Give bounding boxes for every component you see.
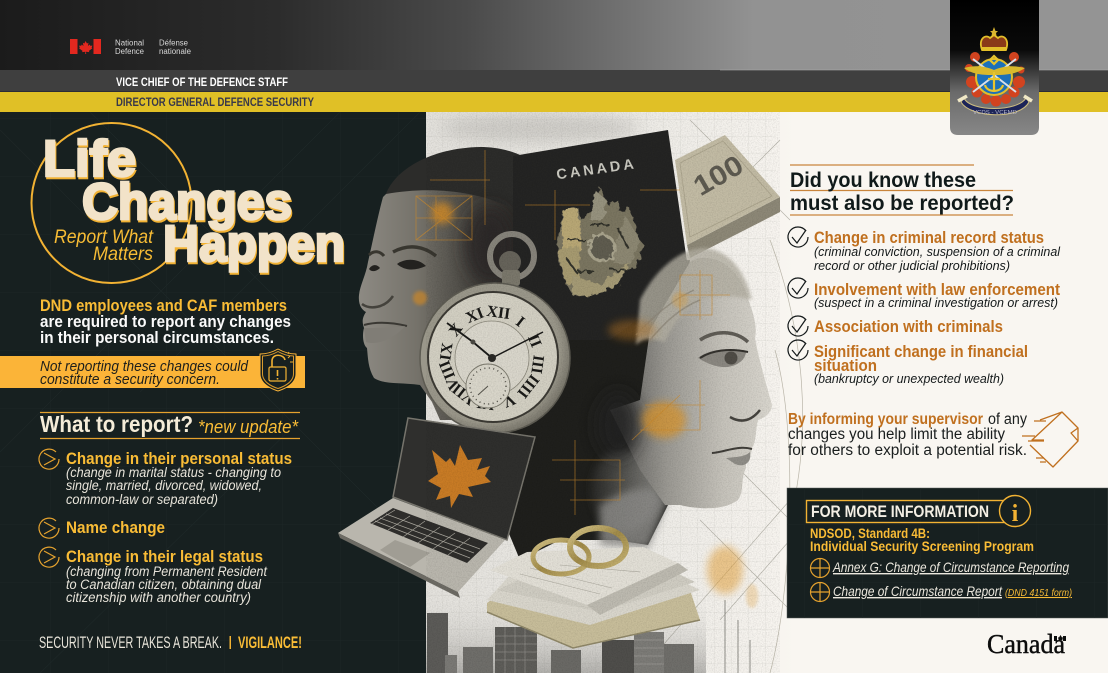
panel heading: FOR MORE INFORMATION (811, 502, 989, 521)
central illustration (338, 112, 803, 673)
item: legal status: citizenship with another country) (66, 590, 251, 605)
heading: did you know: Did you know these (790, 168, 976, 192)
reference title: Individual Security Screening Program (810, 539, 1034, 554)
watch numerals: VI (476, 393, 496, 413)
header title: VICE CHIEF OF THE DEFENCE STAFF (116, 75, 288, 89)
intro text (40, 297, 291, 347)
link: DND 4151 form: Change of Circumstance Report (833, 583, 1003, 599)
icon: passport (513, 130, 687, 340)
bill amount: 100 (688, 149, 749, 202)
icon: coat of arms (557, 187, 644, 297)
title: Life (43, 130, 136, 187)
item: name change (39, 518, 165, 538)
icon: info: i (1012, 501, 1019, 527)
item: personal status: single, married, divorced, widowed, (66, 478, 262, 493)
item: legal status: (changing from Permanent Resident (66, 564, 268, 579)
item: law enforcement: (suspect in a criminal investigation or arrest) (814, 295, 1058, 310)
left panel content (0, 123, 345, 652)
callout: security concern (0, 349, 305, 391)
header band (0, 0, 1108, 112)
watch numerals: III (527, 354, 547, 375)
item: law enforcement (788, 278, 1060, 310)
watch numerals: IIII (513, 371, 542, 401)
text: informing your supervisor: for others to exploit a potential risk. (788, 442, 1027, 459)
watch numerals: X (446, 320, 467, 340)
heading: what to report: *new update* (198, 417, 299, 437)
intro text: DND employees and CAF members (40, 297, 287, 315)
item: financial situation (788, 340, 1028, 386)
item: criminal record: record or other judicial prohibitions) (814, 258, 1010, 273)
icon: shield with open lock (260, 349, 296, 391)
logo: National Defence signature: National (115, 38, 144, 48)
intro text: in their personal circumstances. (40, 329, 274, 347)
header subtitle: DIRECTOR GENERAL DEFENCE SECURITY (116, 95, 314, 109)
item: financial situation: (bankruptcy or unexpected wealth) (814, 371, 1004, 386)
text: informing your supervisor: changes you help limit the ability (788, 426, 1005, 443)
title: Changes (82, 173, 292, 230)
text: informing your supervisor: By informing your supervisor (788, 411, 983, 428)
watch numerals: VIII (436, 358, 463, 392)
panel: emblem tab (950, 0, 1039, 135)
panel: left dark panel background (0, 112, 426, 673)
watch numerals: XI (464, 305, 486, 327)
item: personal status: common-law or separated) (66, 492, 218, 507)
title tagline (54, 227, 154, 265)
logo: National Defence signature: nationale (159, 47, 192, 56)
watch numerals (431, 297, 553, 419)
icon: stack of papers (487, 547, 700, 648)
item: legal status: to Canadian citizen, obtaining dual (66, 577, 262, 592)
title: Happen (163, 215, 345, 272)
intro text: are required to report any changes (40, 313, 291, 331)
text: informing your supervisor: of any (988, 411, 1027, 428)
text: informing your supervisor (788, 411, 1027, 459)
watch numerals: IX (437, 341, 457, 362)
icon: 100 dollar bills (675, 135, 780, 258)
watch numerals: I (512, 314, 528, 331)
decorative circle (32, 123, 192, 283)
orange geometric splashes (413, 150, 758, 608)
watch numerals: V (500, 390, 518, 410)
watch numerals: VII (449, 380, 479, 408)
footer slogan: VIGILANCE! (238, 633, 302, 652)
icon: flying envelope (1022, 412, 1078, 467)
heading: what to report (40, 411, 300, 438)
title tagline: Matters (93, 244, 153, 265)
icon: woman's profile (596, 248, 772, 508)
bottom skyline (426, 590, 750, 673)
item: personal status (39, 449, 292, 507)
panel heading (806, 496, 1030, 527)
title (43, 130, 345, 272)
watch numerals: XII (485, 303, 511, 323)
link: Annex G: Annex G: Change of Circumstance Reporting (832, 559, 1069, 575)
icon: pocket watch (420, 234, 570, 433)
callout: security concern: constitute a security concern. (40, 372, 220, 388)
icon: laptop (338, 418, 535, 598)
title tagline: Report What (54, 227, 154, 248)
heading: did you know: must also be reported? (790, 191, 1014, 215)
icon: VCDS crest: VCDS - VCEMD (973, 110, 1017, 116)
link: DND 4151 form: (DND 4151 form) (1005, 587, 1072, 599)
item: financial situation: Significant change in financial (814, 343, 1028, 361)
reference title (810, 526, 1034, 554)
item: association with criminals: Association with criminals (814, 318, 1003, 336)
item: criminal record: (criminal conviction, suspension of a criminal (814, 244, 1061, 259)
logo: National Defence signature: Défense (159, 38, 189, 48)
passport label: CANADA (555, 157, 635, 183)
item: name change: Name change (66, 519, 165, 537)
Canada wordmark: Canada (987, 629, 1065, 659)
heading: what to report: What to report? (40, 411, 193, 437)
item: personal status: (change in marital status - changing to (66, 465, 281, 480)
list: what to report (39, 449, 292, 605)
item: criminal record: Change in criminal record status (814, 229, 1044, 247)
panel: did you know (788, 165, 1061, 386)
item: financial situation: situation (814, 357, 877, 375)
icon: maple leaf (428, 445, 491, 508)
panel: for more information (787, 488, 1108, 618)
watch numerals: II (524, 332, 544, 350)
item: personal status: Change in their personal status (66, 450, 292, 468)
item: legal status (39, 547, 268, 605)
item: law enforcement: Involvement with law enforcement (814, 281, 1060, 299)
heading: did you know (790, 165, 1014, 215)
item: legal status: Change in their legal status (66, 548, 263, 566)
item: criminal record (788, 227, 1061, 273)
logo: National Defence signature (70, 38, 192, 56)
footer slogan: SECURITY NEVER TAKES A BREAK. (39, 633, 222, 652)
dark central shadow (455, 260, 690, 560)
link: Annex G (810, 558, 1069, 578)
link: DND 4151 form (810, 582, 1072, 602)
icon: man's profile (359, 147, 525, 420)
icon: wedding rings (533, 528, 626, 574)
reference title: NDSOD, Standard 4B: (810, 526, 930, 541)
logo: National Defence signature: Defence (115, 47, 145, 56)
callout: security concern: Not reporting these changes could (40, 359, 249, 375)
